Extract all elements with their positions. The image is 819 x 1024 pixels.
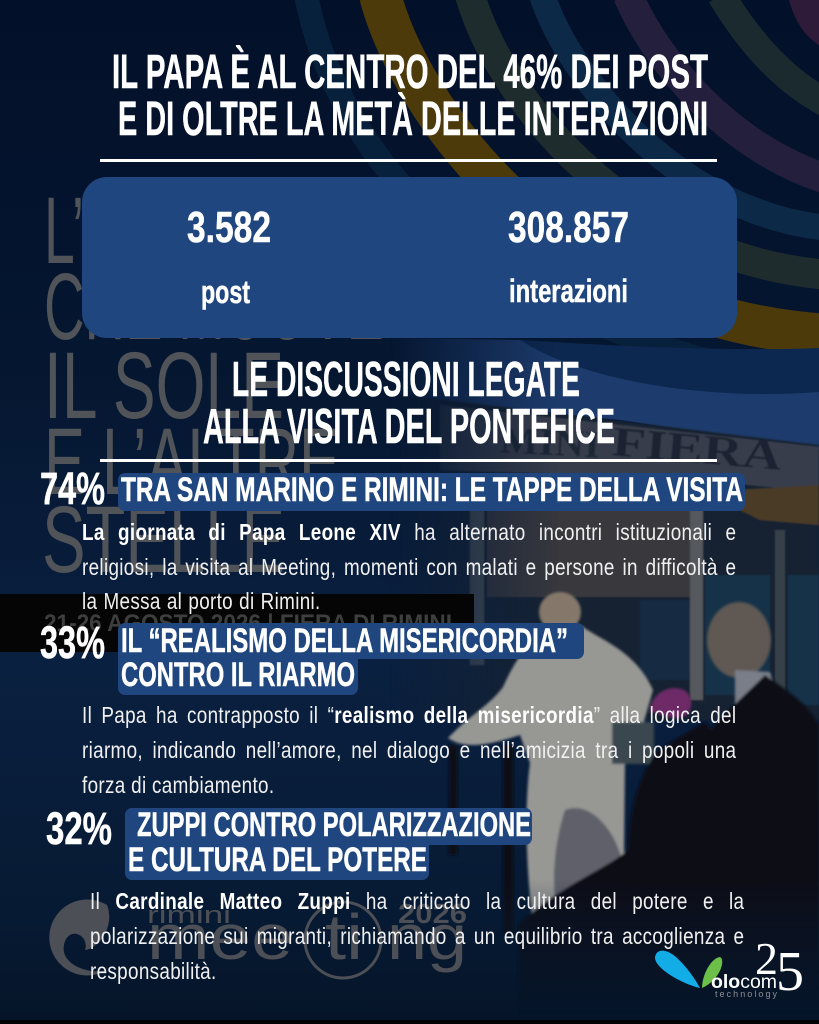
topic 3: [46, 803, 532, 880]
meeting logo watermark: [49, 898, 467, 978]
body paragraphs: Il Papa ha contrapposto il “realismo della misericordia” alla logica del: [82, 702, 736, 728]
logo: Volocom 25: olocom: [711, 972, 777, 993]
ghost event title: CHE MUOVE: [44, 254, 384, 360]
ghost event title: IL SOLE: [44, 333, 284, 439]
topic heading: ZUPPI CONTRO POLARIZZAZIONE: [137, 806, 531, 844]
body paragraphs: polarizzazione sui migranti, richiamando a un equilibrio tra accoglienza e: [90, 923, 744, 949]
ghost event title: L’: [44, 178, 84, 284]
meeting logo watermark: ti: [325, 901, 363, 973]
stat: interazioni: 308.857: [508, 203, 629, 252]
topic 2: [40, 617, 584, 695]
topic heading: E CULTURA DEL POTERE: [128, 841, 427, 879]
topic heading: [128, 806, 531, 879]
percentage 74: 74%: [40, 463, 105, 514]
percentage 33: 33%: [40, 617, 105, 668]
body paragraphs: responsabilità.: [90, 958, 217, 984]
photo backdrop: blue arc and fiera building: FIERA: [610, 419, 785, 480]
topic heading: CONTRO IL RIARMO: [121, 656, 355, 694]
meeting logo watermark: rimini: [147, 902, 231, 929]
topic heading: IL “REALISMO DELLA MISERICORDIA”: [121, 622, 568, 660]
stat: post: post: [201, 274, 250, 310]
meeting logo watermark: ng: [387, 901, 467, 973]
ghost event title: [42, 178, 384, 593]
bishop robe: [517, 722, 712, 971]
label highlight: [125, 808, 532, 880]
label highlight: [118, 623, 584, 695]
body paragraphs: La giornata di Papa Leone XIV ha alternato incontri istituzionali e: [82, 519, 736, 545]
barrier posts: [503, 745, 513, 935]
meeting logo watermark: mee: [147, 901, 293, 973]
man coat: [710, 674, 819, 971]
body paragraphs: riarmo, indicando nell’amore, nel dialogo e nell’amicizia tra i popoli una: [82, 737, 736, 763]
pope cape and robe: [448, 626, 653, 925]
logo: Volocom 25: 5: [776, 941, 804, 1003]
ghost event title: STELLE: [42, 487, 285, 593]
stat: interazioni: interazioni: [509, 273, 628, 309]
paragraph: topic 3: [90, 888, 744, 984]
stat: interazioni: [508, 203, 629, 309]
meeting logo watermark: 2026: [398, 898, 467, 929]
body paragraphs: Il Cardinale Matteo Zuppi ha criticato la cultura del potere e la: [90, 888, 744, 914]
logo: Volocom 25: [655, 933, 804, 1003]
photo: pope and people: [447, 590, 819, 971]
paragraph: topic 1: [82, 519, 736, 614]
ghost event title: E L’ALTRE: [44, 409, 340, 515]
man head: [707, 602, 771, 678]
body paragraphs: religiosi, la visita al Meeting, momenti con malati e persone in difficoltà e: [82, 554, 736, 580]
stat: post: 3.582: [187, 203, 271, 252]
section heading: [203, 353, 615, 454]
stat: post: [187, 203, 271, 310]
topic heading: [121, 622, 568, 694]
black date band: [0, 594, 474, 652]
section heading: LE DISCUSSIONI LEGATE: [232, 353, 580, 407]
crowd: [612, 722, 654, 764]
photo backdrop: blue arc and fiera building: MINI: [499, 419, 601, 467]
photo backdrop: blue arc and fiera building: [380, 338, 819, 720]
paragraph: topic 2: [82, 702, 736, 798]
topic 1: [40, 463, 745, 514]
percentage 32: 32%: [46, 803, 112, 854]
title: [112, 45, 708, 146]
pope head: [538, 590, 582, 624]
label highlight: [118, 473, 745, 511]
logo: Volocom 25: 2: [755, 933, 778, 984]
body paragraphs: forza di cambiamento.: [82, 772, 274, 798]
coloured arcs: [306, 0, 819, 385]
logo: Volocom 25: technology: [715, 989, 778, 999]
panel: totals: [82, 177, 737, 338]
bishop cap: [650, 688, 691, 718]
black date band: 21-26 AGOSTO 2026 | FIERA DI RIMINI: [44, 610, 452, 637]
body paragraphs: la Messa al porto di Rimini.: [82, 588, 321, 614]
